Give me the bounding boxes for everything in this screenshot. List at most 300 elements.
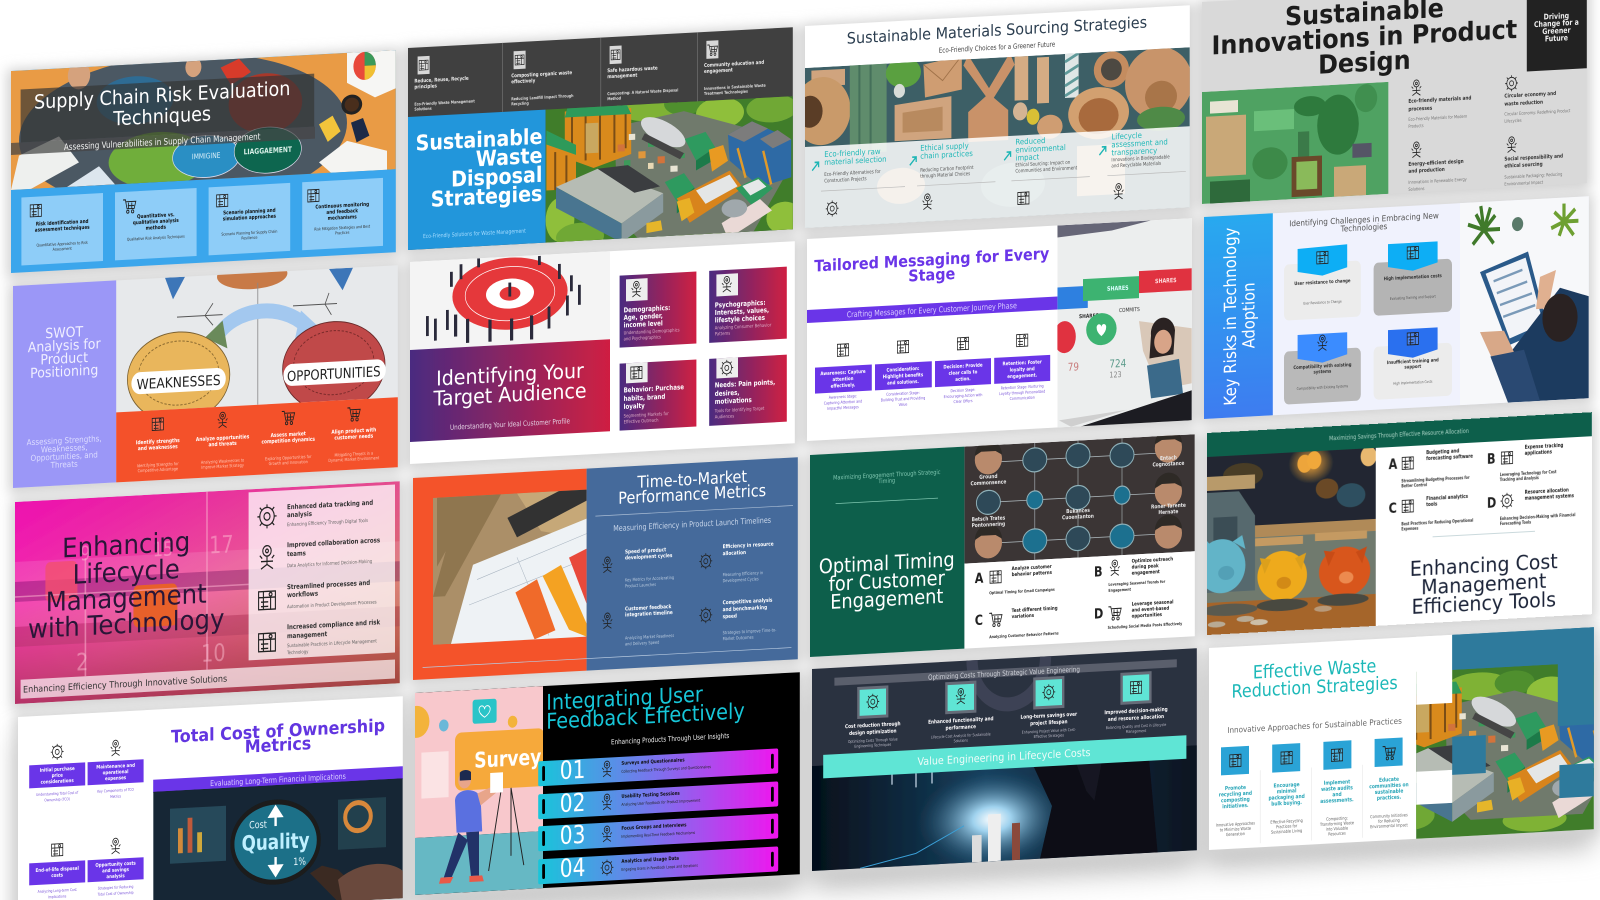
stage: consideration [875, 339, 932, 408]
cell 2: Recycling [511, 101, 529, 107]
title: Product [40, 350, 88, 369]
item B [1487, 442, 1563, 483]
panel: Optimal Timing for Customer Engagement [810, 427, 1195, 657]
cell 4: Innovations in Sustainable Waste [704, 83, 766, 91]
title: Innovations in Product [1212, 14, 1517, 61]
title: Positioning [30, 363, 98, 382]
item C: Expenses [1401, 526, 1418, 532]
photo: green eco flat-lay [1202, 82, 1388, 204]
subtitle: Optimizing Costs Through Strategic Value Engineering [928, 666, 1080, 682]
metric: maintenance [88, 739, 144, 800]
title: Metrics [245, 732, 311, 757]
panel: Enhancing Lifecycle Management with Technology [15, 481, 400, 704]
step 01 [538, 745, 778, 787]
strategy 4: sustainable [1375, 788, 1404, 796]
panel: Tailored Messaging for Every Stage [807, 218, 1192, 444]
cell 3: Method [607, 96, 621, 101]
strategy 2: Effective Recycling [1270, 817, 1303, 825]
metric: initial purchase: Ownership (TCO) [44, 797, 71, 803]
stage: retention [994, 333, 1050, 402]
step 04: Analytics and Usage Data [621, 855, 679, 865]
right translucent panel [249, 484, 395, 660]
card 4: continuous monitoring: Continuous monitoring [315, 201, 369, 211]
metric 3: integration timeline [625, 610, 673, 619]
metric: end-of-life: Analyzing Long-term Cost [38, 887, 77, 894]
item 3 [1408, 139, 1467, 192]
item 1: Eco-Friendly Materials for Modern [1408, 113, 1468, 122]
cell dividers [502, 32, 698, 112]
photo: social media metrics on a phone: COMMITS [1119, 307, 1140, 314]
gradient background: 17 [209, 531, 234, 560]
card: insufficient training [1374, 327, 1452, 400]
column 4: transparency [1111, 146, 1158, 158]
column 3: Ethical Sourcing: Impact on [1015, 159, 1070, 169]
panel: Total Cost of Ownership Metrics [18, 696, 403, 900]
photo: people network diagram: Bukances [1066, 507, 1090, 515]
option B: B [1094, 563, 1103, 580]
divider rule [1433, 531, 1535, 537]
column separators [1260, 765, 1363, 843]
photo: people network diagram [964, 427, 1195, 564]
column 2: chain practices [920, 149, 973, 161]
gradient title banner [410, 339, 610, 442]
card 1: risk identification: Risk identification and [36, 218, 89, 228]
card: demographics: and Psychographics [624, 334, 661, 343]
card: behavior: Behavior: Purchase [624, 384, 684, 395]
column 1: Identify strengths [136, 438, 180, 447]
photo: people network diagram: Cognostance [1152, 460, 1185, 469]
vertical title: Key Risks in Technology [1221, 227, 1240, 406]
subtitle: Enhancing Products Through User Insights [611, 733, 729, 747]
stage: consideration: Building Trust and Providing [881, 396, 925, 403]
metric: end-of-life: Implications [48, 894, 67, 899]
cell 2: effectively [511, 78, 535, 86]
column 4: Dynamic Market Environment [328, 455, 380, 463]
card: demographics [620, 272, 696, 348]
panel: Enhancing Cost Management Efficiency Tools [1197, 412, 1592, 636]
card: psychographics: Analyzing Consumer Behavior [715, 322, 771, 332]
green title panel [810, 447, 964, 657]
card: behavior: Effective Outreach [624, 417, 659, 426]
item 1: Eco-friendly materials and [1408, 95, 1472, 105]
photo: people network diagram: Ground [979, 473, 998, 481]
item 4: management [287, 631, 327, 641]
column 1: Eco-Friendly Alternatives for [824, 168, 881, 178]
benefit 4: and resource allocation [1108, 714, 1165, 723]
item 4 [259, 619, 381, 658]
column 1 [812, 145, 905, 218]
title: Supply Chain Risk Evaluation [34, 78, 290, 114]
column 4: Lifecycle [1111, 130, 1142, 142]
metric 3: and Delivery Speed [625, 639, 660, 647]
metric 2: Development Cycles [723, 576, 759, 583]
metric: maintenance: expenses [105, 776, 126, 783]
option B: Optimize outreach [1132, 556, 1173, 565]
title: Effective Waste [1253, 656, 1376, 684]
photo: office table with venn diagram: LIAGGAEMENT [244, 145, 292, 157]
stage: decision: Decision: Provide [943, 362, 983, 371]
stage: awareness: attention [833, 376, 853, 383]
title: Optimal Timing [819, 548, 955, 579]
subtitle: Timing [878, 478, 896, 486]
column 2: Improve Market Strategy [201, 462, 245, 470]
title: Lifecycle [73, 554, 180, 591]
title: Tailored Messaging for Every [814, 244, 1049, 276]
item 3: and production [1408, 166, 1445, 175]
metric 3: Customer feedback [625, 604, 672, 613]
item A: A [1389, 455, 1397, 473]
metric 3: Analyzing Market Readiness [625, 632, 674, 641]
card 1: risk identification: Assessment [53, 246, 72, 252]
item 2: Lifecycles [1504, 117, 1522, 124]
item 2 [1504, 72, 1571, 124]
step 02: Usability Testing Sessions [621, 790, 680, 800]
subtitle: Technologies [1340, 222, 1387, 234]
stage: consideration: Value [899, 402, 908, 407]
panel: Sustainable Innovations in Product Design [1202, 0, 1587, 204]
item 3: Streamlined processes and [287, 579, 370, 592]
magnifier text: 1% [293, 857, 306, 868]
card 2: quantitative vs qualitative [115, 188, 197, 260]
card: high implementation costs [1374, 241, 1452, 316]
strategy 4 [1369, 737, 1409, 829]
benefit 1: design optimization [849, 728, 897, 737]
step 02: 02 [560, 789, 585, 819]
metric 4: Market Outcomes [723, 634, 754, 641]
photo: office table with venn diagram: IMMIGINE [192, 151, 220, 161]
item D [1487, 487, 1575, 527]
card 1: risk identification: assessment techniques [35, 224, 90, 234]
blue title panel [408, 110, 546, 250]
photo: office table with venn diagram [11, 50, 396, 190]
column 2: Analyze opportunities [196, 434, 249, 443]
metric 4: and benchmarking [723, 604, 768, 613]
stage: retention: Retention: Foster [1003, 359, 1043, 368]
column 3: Growth and Innovation [269, 459, 308, 466]
card 3: scenario planning: Scenario planning and [223, 207, 276, 217]
panel: Time-to-Market Performance Metrics [413, 457, 798, 680]
option D: and event-based [1132, 605, 1169, 614]
photo: magnifier on dashboard [153, 778, 403, 900]
photo: people network diagram: Pontonnering [972, 521, 1006, 529]
card: behavior: Segmenting Markets for [624, 411, 669, 420]
option B [1094, 556, 1173, 594]
black corner box: Future [1545, 33, 1568, 44]
card: psychographics: Psychographics: [715, 299, 766, 310]
item 3 [259, 579, 377, 612]
photo: social media metrics on a phone [1053, 218, 1192, 431]
item D: Enhancing Decision-Making with Financial [1500, 513, 1575, 521]
cell 4: engagement [704, 67, 734, 75]
card: high implementation costs: High implementation costs [1384, 273, 1442, 282]
item 1 [257, 499, 373, 530]
card 2: quantitative vs qualitative: qualitative analysis [133, 218, 179, 227]
panel: Effective Waste Reduction Strategies [1209, 627, 1594, 850]
item 2: Circular economy and [1504, 90, 1557, 100]
benefit 2: Enhanced functionality and [928, 716, 994, 726]
item 2: waste reduction [1504, 99, 1544, 108]
title: Sustainable Materials Sourcing Strategies [847, 13, 1147, 48]
option D: D [1094, 605, 1103, 622]
column 4 [1099, 128, 1186, 200]
black corner box: Change for a [1534, 17, 1579, 29]
illustration: isometric waste facility [1416, 662, 1594, 839]
photo: social media metrics on a phone: SHARES [1079, 313, 1099, 321]
item 4: Sustainable Practices in Lifecycle Management [287, 638, 377, 650]
gradient background [15, 481, 400, 704]
metric: initial purchase: Understanding Total Cost of [36, 790, 79, 797]
metric: initial purchase [29, 742, 85, 803]
item 4: Technology [286, 649, 309, 657]
card 2: quantitative vs qualitative: Quantitative vs. [137, 212, 175, 220]
step 03: 03 [560, 821, 585, 851]
item C: Best Practices for Reducing Operational [1401, 518, 1473, 527]
item 3: Innovations in Renewable Energy [1408, 176, 1467, 185]
step 02: Analyzing User Feedback for Product Improvement [621, 798, 701, 807]
card: demographics: Understanding Demographics [624, 327, 680, 337]
title: Integrating User [546, 681, 703, 715]
metric: opportunity costs: analysis [106, 873, 125, 880]
stage: decision [935, 336, 991, 405]
cell 1 [414, 53, 475, 112]
item B: Leveraging Technology for Cost [1500, 470, 1557, 477]
metric 1: Product Launches [625, 581, 656, 589]
item D: Resource allocation [1525, 487, 1569, 496]
benefit 1: Engineering Techniques [854, 742, 891, 749]
stage: retention: Loyalty through Personalized [999, 389, 1045, 396]
card: psychographics: lifestyle choices [715, 314, 765, 325]
metric 4: Competitive analysis [723, 597, 773, 606]
benefit 2: performance [946, 724, 977, 732]
item 2: Circular Economy: Redefining Product [1504, 108, 1571, 117]
stage: retention: Retention Stage: Nurturing [1001, 384, 1044, 391]
photo: social media metrics on a phone: SHARES [1107, 285, 1129, 293]
step 03 [538, 810, 778, 852]
step 03: Focus Groups and Interviews [621, 822, 687, 832]
benefit 2 [928, 681, 994, 745]
metric 4: speed [723, 613, 737, 620]
cell 4: Community education and [704, 59, 764, 69]
option D [1094, 598, 1183, 631]
column 3: Reduced [1015, 136, 1046, 147]
item 1 [1408, 77, 1472, 129]
card 3: scenario planning: Resilience [241, 235, 258, 241]
strategy 1: to Minimize Waste [1220, 825, 1252, 833]
benefit 3: project lifespan [1030, 719, 1068, 727]
item C: tools [1426, 501, 1438, 508]
metric: opportunity costs: and savings [102, 867, 129, 875]
item 3: Energy-efficient design [1408, 158, 1464, 168]
item A: Budgeting and [1426, 448, 1459, 456]
orange band [116, 397, 398, 482]
magnifier text: Quality [242, 828, 310, 856]
metric 2: Measuring Efficiency in [723, 570, 764, 577]
benefit 4: Management [1126, 729, 1147, 734]
option A: Analyze customer [1012, 563, 1052, 572]
item 2: Improved collaboration across [287, 537, 380, 550]
benefit 2: Solutions [954, 738, 968, 743]
card: psychographics: Interests, values, [715, 307, 769, 317]
column 3: Exploring Opportunities for [265, 453, 312, 461]
sign word: Survey [474, 744, 542, 773]
purple band [153, 766, 403, 793]
card: needs: Needs: Pain points, [715, 379, 775, 390]
card: needs: Audiences [715, 413, 734, 421]
cell 3 [607, 42, 678, 101]
title: Stage [908, 264, 955, 286]
title: for Customer [829, 567, 945, 596]
column 2: Reducing Carbon Footprint [920, 164, 974, 174]
title: Analysis for [28, 337, 101, 356]
item A: Better Control [1401, 483, 1427, 489]
title: Feedback Effectively [546, 698, 745, 734]
gradient background: 10 [201, 640, 226, 669]
teal band [823, 735, 1186, 778]
step 04 [538, 843, 778, 885]
wide drop shadow under the bottom row [18, 647, 1594, 900]
metric: initial purchase: considerations [41, 778, 74, 786]
stage: awareness: Impactful Messages [827, 405, 859, 411]
strategy 4: practices. [1377, 794, 1401, 802]
option D: opportunities [1132, 612, 1162, 620]
subtitle: Threats [50, 459, 78, 470]
strategy 4: Environmental Impact [1370, 822, 1408, 829]
gradient background: 15 [153, 538, 173, 562]
illustration: SWOT circles: WEAKNESSES [137, 372, 221, 393]
subtitle: Enhancing Efficiency Through Innovative Solutions [23, 674, 228, 696]
illustration: SWOT circles: OPPORTUNITIES [287, 363, 381, 385]
card 4: continuous monitoring: Practices [335, 230, 350, 236]
panel: Integrating User Feedback Effectively [404, 672, 800, 896]
teal-blue right block [1452, 627, 1594, 803]
metric 1 [603, 546, 675, 590]
item 2: Data Analytics for Informed Decision-Making [287, 558, 372, 570]
item 2: teams [287, 550, 306, 559]
card 4: continuous monitoring: mechanisms [328, 214, 357, 222]
column 1: Eco-friendly raw [824, 147, 881, 159]
card 1: risk identification: Quantitative Approaches to Risk [36, 240, 89, 248]
card 2: quantitative vs qualitative: Qualitative Risk Analysis Techniques [127, 234, 185, 242]
column 2: Ethical supply [920, 141, 969, 153]
option A: Optimal Timing for Email Campaigns [989, 587, 1055, 595]
strategy 1: Generation [1226, 831, 1245, 837]
item B: Expense tracking [1525, 442, 1563, 451]
metric: initial purchase: price [52, 772, 63, 779]
column 2: and threats [208, 440, 237, 449]
option C [975, 605, 1059, 640]
rule and subtitle [595, 505, 793, 534]
item C [1389, 493, 1473, 532]
subtitle: Innovative Approaches for Sustainable Practices [1227, 716, 1402, 735]
title: Efficiency Tools [1412, 588, 1556, 619]
benefit 3 [1021, 677, 1078, 740]
benefit 3: Enhancing Project Value with Cost- [1022, 727, 1076, 735]
vertical title: Adoption [1239, 282, 1259, 349]
benefit 4 [1104, 672, 1168, 735]
metric 1: Speed of product [625, 547, 667, 556]
card: needs: desires, [715, 389, 740, 398]
title: with Technology [28, 604, 224, 646]
strategy 3: Composting: [1326, 815, 1348, 822]
strategy 3: assessments. [1320, 797, 1354, 805]
photo: people around a target [410, 251, 610, 350]
subtitle: Weaknesses, [41, 443, 88, 455]
column 3: environmental [1015, 143, 1066, 155]
benefit 3: Long-term savings over [1021, 711, 1078, 721]
metric: maintenance: Metrics [110, 794, 121, 799]
photo: bar chart on clipboard [433, 490, 587, 645]
metric: maintenance: operational [103, 769, 129, 777]
strategy 2 [1268, 743, 1305, 835]
stage: consideration: and solutions. [887, 379, 919, 387]
stage: consideration: Consideration Stage: [886, 391, 920, 397]
item 4 [1504, 134, 1564, 187]
metric 3 [603, 603, 674, 648]
card 4: continuous monitoring [302, 178, 383, 250]
step 02 [538, 778, 778, 820]
cell 3: Safe hazardous waste [607, 65, 658, 74]
column 4: Innovations in Biodegradable [1111, 154, 1170, 164]
metric 1: Key Metrics for Accelerating [625, 574, 675, 583]
column 4: Mitigating Threats in a [335, 450, 374, 458]
card: needs: motivations [715, 397, 752, 406]
card 3: scenario planning [209, 183, 290, 255]
item 1: processes [1408, 105, 1432, 113]
option C: C [975, 611, 983, 628]
photo: kraft packaging materials [793, 42, 1192, 229]
subtitle: Crafting Messages for Every Customer Journey Phase [847, 300, 1017, 320]
item B: B [1487, 450, 1496, 467]
strategy 3: and [1332, 791, 1342, 799]
title: Disposal [451, 162, 542, 192]
card: insufficient training: support [1404, 363, 1421, 371]
strategy 2: packaging and [1268, 793, 1305, 802]
stage: consideration: Highlight benefits [883, 372, 923, 381]
item 4: Sustainable Packaging: Reducing [1504, 171, 1563, 180]
title: Identifying Your [436, 359, 585, 391]
cell 1: Solutions [414, 106, 432, 112]
metric: opportunity costs: Total Cost of Ownership [97, 890, 134, 897]
green header band [1207, 412, 1592, 457]
column 3: Assess market [271, 431, 306, 439]
column 2: Analyzing Weaknesses to [201, 457, 245, 465]
strategy 1: initiatives. [1222, 802, 1249, 810]
subtitle: Eco-Friendly Choices for a Greener Future [939, 41, 1055, 55]
strategy 1: recycling and [1219, 790, 1252, 799]
title: Techniques [112, 103, 211, 131]
option A: A [975, 569, 984, 586]
black corner box: Driving [1544, 10, 1569, 22]
title: Management [46, 579, 207, 619]
panel: Sustainable Waste Disposal Strategies [408, 27, 793, 250]
rule and subtitle: Measuring Efficiency in Product Launch Timelines [613, 515, 771, 533]
stage: awareness: Capturing Attention and [824, 399, 862, 406]
gradient background: 9 [80, 542, 90, 566]
purple band [807, 296, 1057, 323]
item A: Streamlining Budgeting Processes for [1401, 475, 1470, 484]
title: Management [1421, 569, 1547, 600]
item D: Forecasting Tools [1500, 520, 1531, 526]
lavender title panel [13, 280, 116, 488]
panel: SWOT Analysis for Product Positioning [13, 253, 398, 488]
item 1: Enhancing Efficiency Through Digital Tools [287, 517, 369, 529]
metric 2: Efficiency in resource [723, 541, 774, 550]
panel: Value Engineering in Lifecycle Costs [812, 648, 1197, 879]
item 4: Increased compliance and risk [287, 619, 381, 632]
band title: Value Engineering in Lifecycle Costs [917, 748, 1091, 768]
card: compatibility: Compatibility with existing [1293, 362, 1351, 371]
black corner box [1527, 0, 1587, 71]
